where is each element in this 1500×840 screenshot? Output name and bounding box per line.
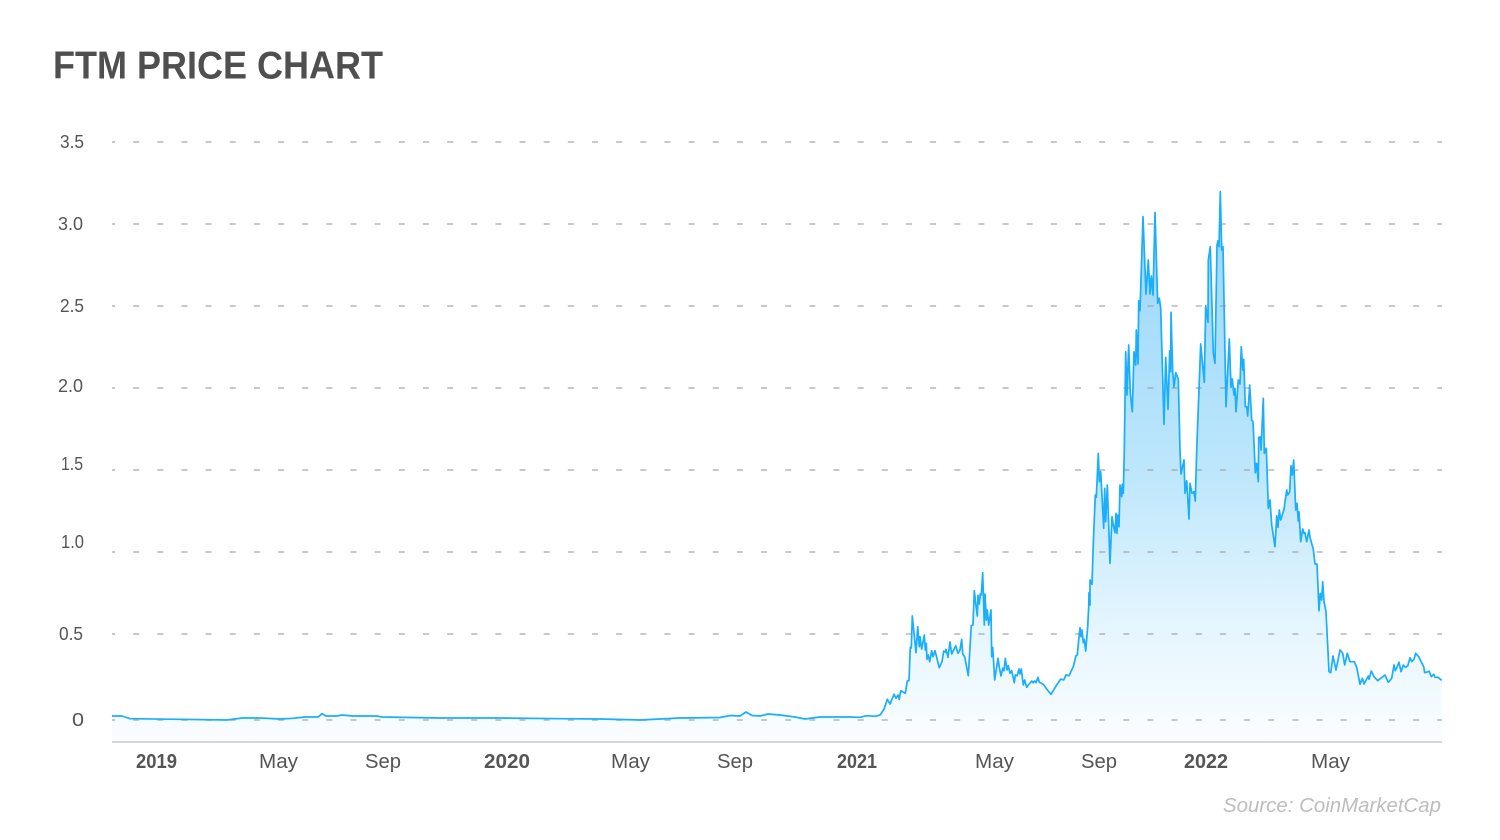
source note: Source: CoinMarketCap [1223, 795, 1441, 817]
title: FTM PRICE CHART [53, 44, 383, 88]
x axis labels: Sep [1081, 751, 1117, 773]
x axis labels: May [611, 751, 650, 773]
x axis labels: May [975, 751, 1014, 773]
price line [112, 192, 1442, 720]
x axis labels: Sep [717, 751, 753, 773]
area fill [112, 192, 1442, 741]
price area chart [112, 142, 1442, 741]
y axis labels: 2.0 [58, 376, 83, 396]
y axis labels: 0.5 [59, 624, 83, 644]
x axis labels: Sep [365, 751, 401, 773]
x axis labels: 2020 [484, 751, 530, 773]
x axis labels [136, 751, 1350, 773]
x axis labels: 2021 [837, 751, 877, 773]
x axis labels: 2019 [136, 751, 177, 773]
x axis labels: May [259, 751, 298, 773]
y axis labels: 2.5 [60, 296, 84, 316]
x axis labels: May [1311, 751, 1350, 773]
y axis labels: 0 [72, 710, 84, 730]
x axis line [112, 741, 1442, 743]
x axis labels: 2022 [1184, 751, 1228, 773]
y axis labels [58, 132, 84, 730]
y axis labels: 3.5 [60, 132, 84, 152]
y axis labels: 3.0 [58, 214, 83, 234]
y axis labels: 1.0 [61, 532, 84, 552]
y axis gridlines [112, 142, 1442, 720]
y axis labels: 1.5 [61, 454, 83, 474]
